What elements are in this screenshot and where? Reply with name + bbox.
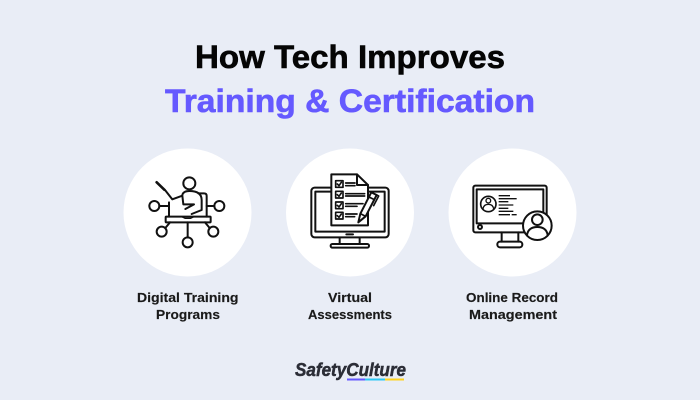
logo wordmark: SafetyCulture xyxy=(295,359,406,380)
icon: instructor with network nodes xyxy=(149,177,224,247)
icon circle xyxy=(286,148,414,276)
panel: online record management xyxy=(448,148,576,322)
panel: virtual assessments xyxy=(286,148,414,322)
panel: digital training programs xyxy=(124,148,252,322)
label: Online Record xyxy=(466,290,558,305)
label line 2: Programs xyxy=(156,307,220,322)
label line 2: Management xyxy=(469,307,558,322)
title line 2: Training & Certification xyxy=(165,83,535,119)
logo underline xyxy=(347,378,404,380)
title line 1: How Tech Improves xyxy=(195,39,505,75)
icon circle xyxy=(448,148,576,276)
icon: monitor with user profile xyxy=(473,186,552,247)
logo: SafetyCulture xyxy=(295,359,406,380)
label: Virtual xyxy=(328,290,372,305)
label line 2: Assessments xyxy=(308,307,392,322)
label: Digital Training xyxy=(137,290,239,305)
title xyxy=(165,39,535,119)
icon circle xyxy=(124,148,252,276)
icon: monitor with checklist and pen xyxy=(311,174,389,248)
